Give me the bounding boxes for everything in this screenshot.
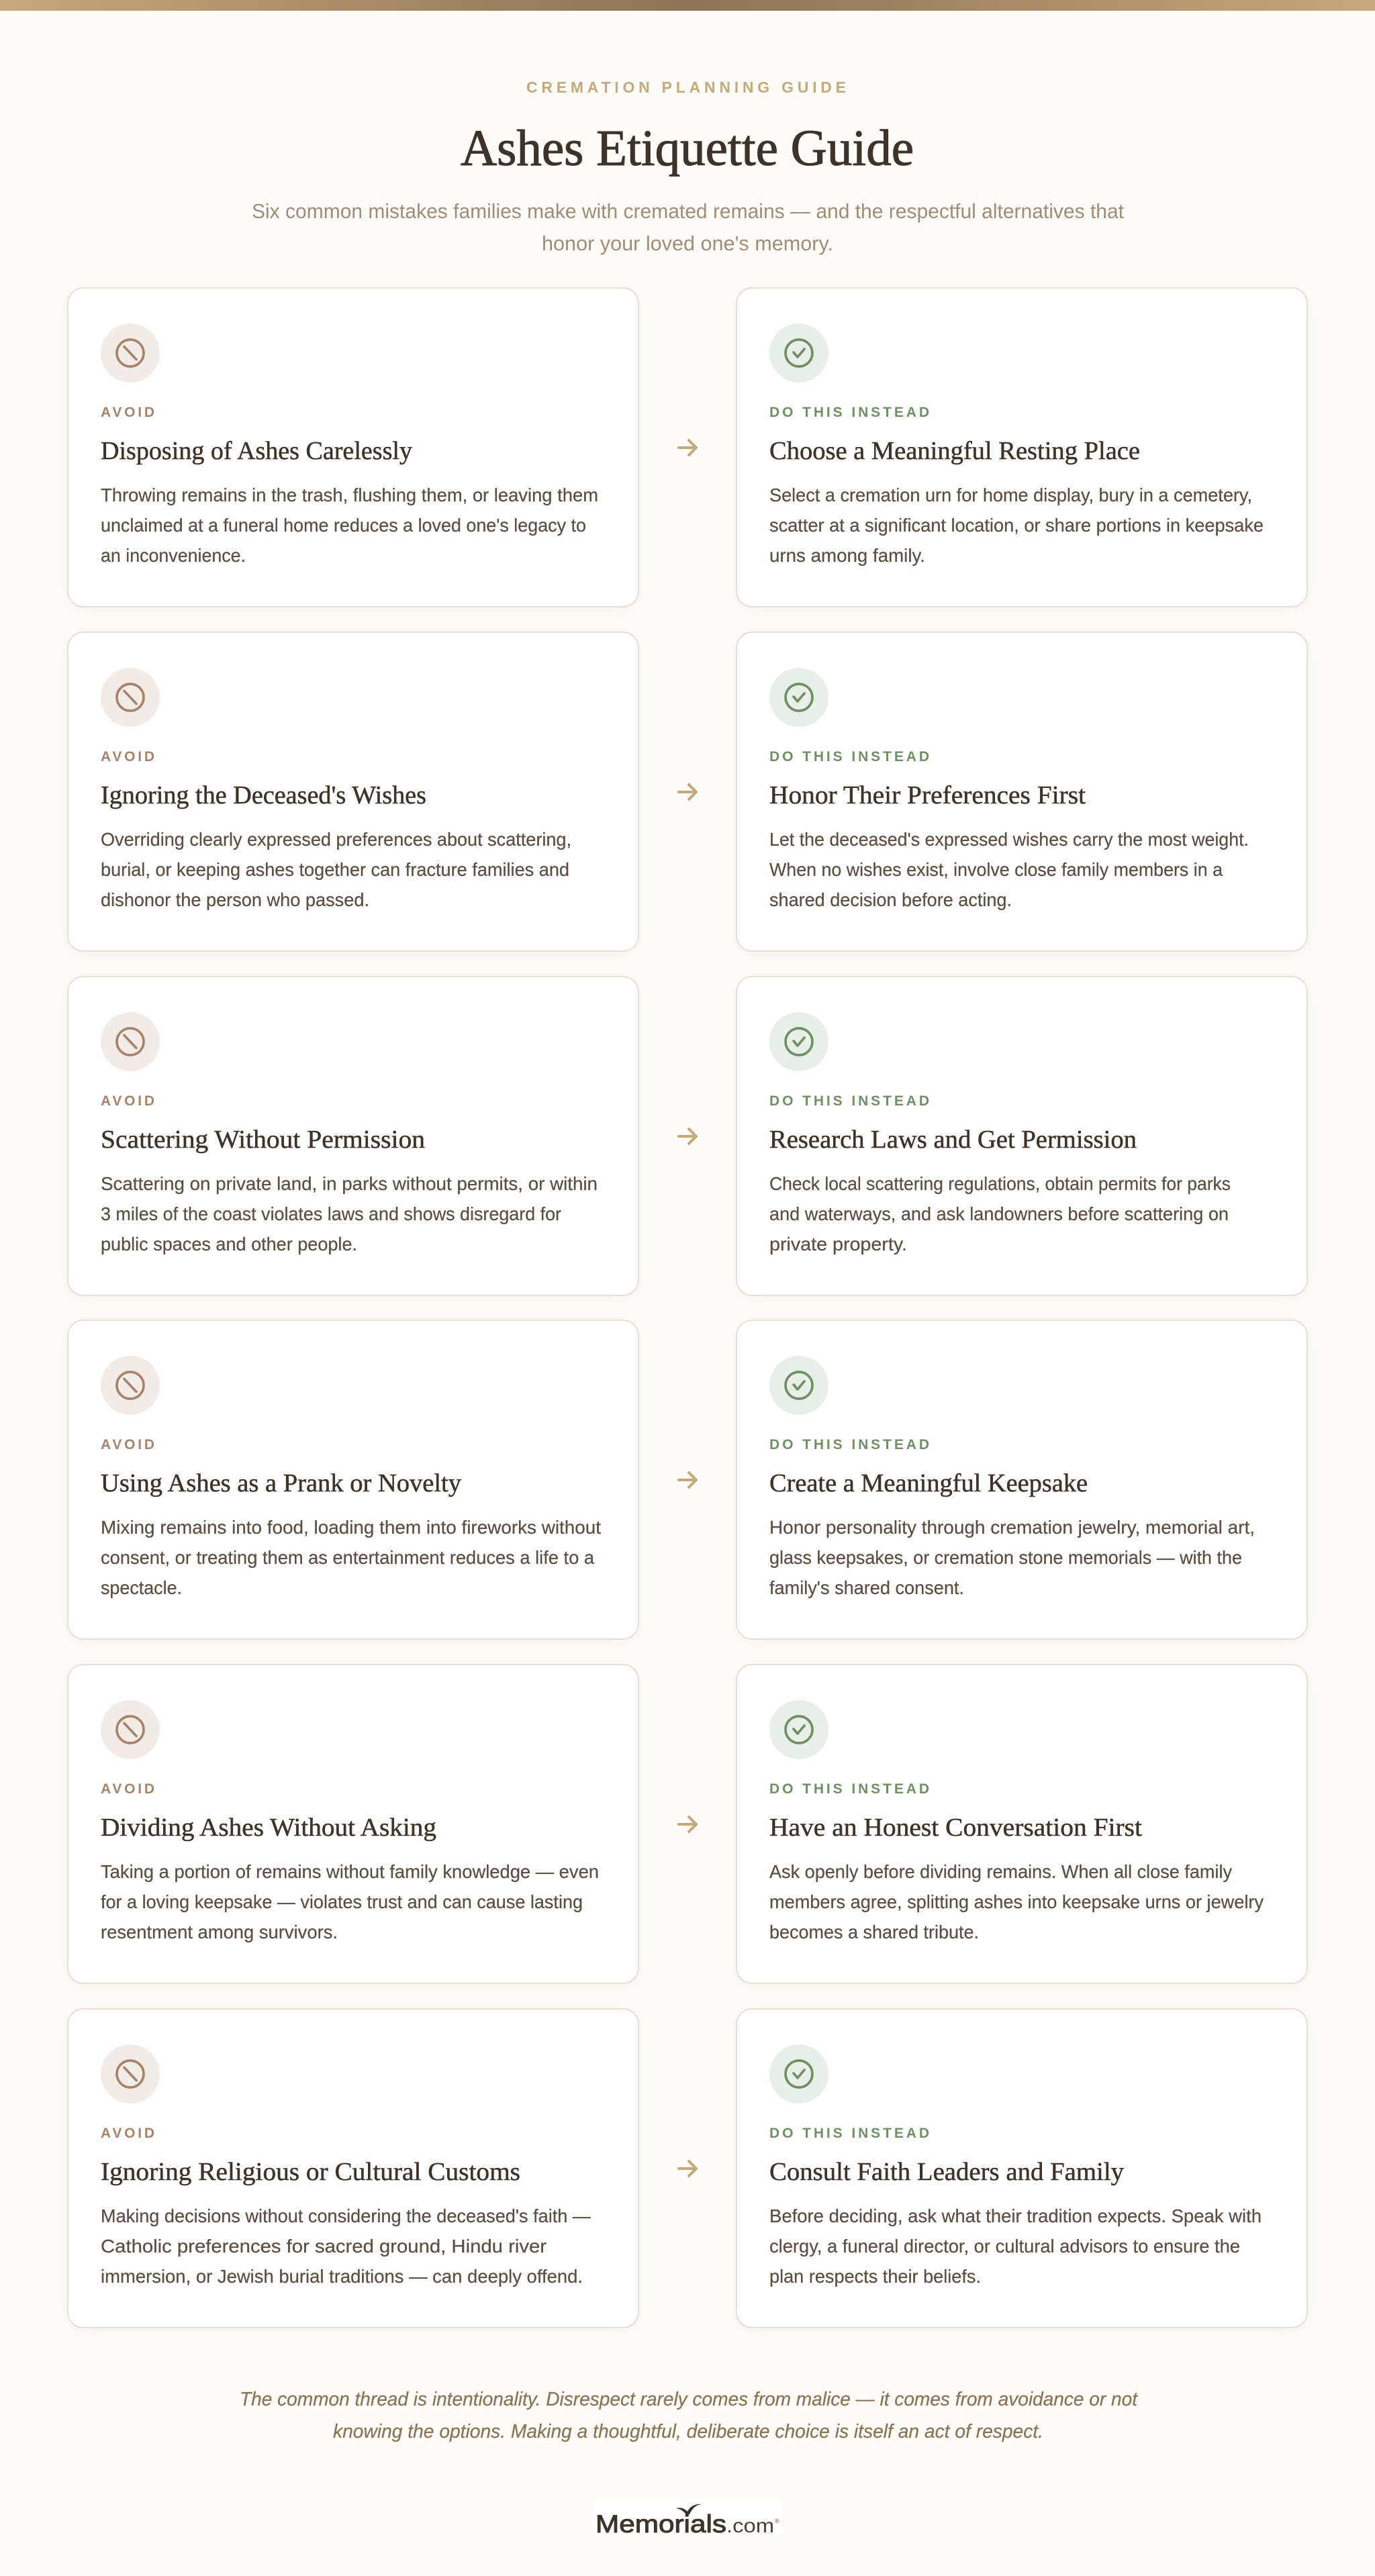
label: AVOID [101,1781,154,1797]
label: DO THIS INSTEAD [769,2126,929,2141]
description: scatter at a significant location, or share portions in keepsake [769,515,1264,536]
logo: Memorials.com [596,2504,779,2535]
description [769,829,1249,910]
description [101,1517,601,1598]
description: and waterways, and ask landowners before scattering on [769,1203,1229,1224]
icon: check [769,324,828,383]
description: clergy, a funeral director, or cultural advisors to ensure the [769,2236,1240,2257]
page header [252,79,1124,255]
heading: Consult Faith Leaders and Family [769,2158,1124,2186]
closing note: knowing the options. Making a thoughtful, deliberate choice is itself an act of respect. [333,2421,1043,2442]
description: Let the deceased's expressed wishes carry the most weight. [769,829,1249,850]
description: Taking a portion of remains without family knowledge — even [101,1861,599,1882]
description: Ask openly before dividing remains. When all close family [769,1861,1232,1882]
description [769,485,1264,566]
description: for a loving keepsake — violates trust and can cause lasting [101,1891,583,1912]
description: plan respects their beliefs. [769,2266,981,2287]
heading: Research Laws and Get Permission [769,1126,1137,1154]
description [769,1517,1255,1598]
panel: instead 5 [736,1664,1308,1984]
label: DO THIS INSTEAD [769,749,929,764]
heading: Choose a Meaningful Resting Place [769,437,1140,465]
description: consent, or treating them as entertainment reduces a life to a [101,1547,594,1568]
description [101,1173,598,1254]
arrow 3 [677,1128,698,1145]
subtitle: honor your loved one's memory. [542,232,833,255]
icon: check [769,2044,828,2103]
label: DO THIS INSTEAD [769,405,929,420]
panel: instead 1 [736,287,1308,607]
description: Scattering on private land, in parks without permits, or within [101,1173,598,1194]
icon: prohibited [101,324,160,383]
heading: Scattering Without Permission [101,1126,425,1154]
label: AVOID [101,749,154,764]
arrow 6 [677,2160,698,2177]
description: Before deciding, ask what their tradition expects. Speak with [769,2206,1262,2226]
description [101,1861,599,1942]
icon: prohibited [101,2044,160,2103]
description: Mixing remains into food, loading them into fireworks without [101,1517,601,1538]
icon: prohibited [101,1356,160,1415]
arrow 1 [677,439,698,456]
label: AVOID [101,405,154,420]
icon: check [769,1700,828,1759]
arrow 4 [677,1471,698,1489]
label: AVOID [101,1437,154,1452]
description: burial, or keeping ashes together can fracture families and [101,859,569,880]
icon: prohibited [101,1700,160,1759]
description: 3 miles of the coast violates laws and shows disregard for [101,1203,561,1224]
logo registered mark: ® [775,2518,779,2524]
heading: Ignoring the Deceased's Wishes [101,781,426,809]
panel: avoid 6 [67,2008,639,2328]
label: AVOID [101,1093,154,1109]
closing note: The common thread is intentionality. Disrespect rarely comes from malice — it comes from avoidance or not [240,2389,1139,2410]
panel: avoid 1 [67,287,639,607]
description: Overriding clearly expressed preferences about scattering, [101,829,571,850]
heading: Ignoring Religious or Cultural Customs [101,2158,520,2186]
panel: avoid 4 [67,1320,639,1640]
heading: Create a Meaningful Keepsake [769,1469,1088,1497]
description: Making decisions without considering the deceased's faith — [101,2206,591,2226]
description: unclaimed at a funeral home reduces a loved one's legacy to [101,515,586,536]
heading: Honor Their Preferences First [769,781,1086,809]
top gradient bar [0,0,1375,11]
description: shared decision before acting. [769,889,1012,910]
description [101,2206,591,2287]
arrow 5 [677,1815,698,1834]
description: an inconvenience. [101,545,246,566]
description: When no wishes exist, involve close family members in a [769,859,1223,880]
description [101,485,598,566]
logo bird [676,2504,702,2516]
description: members agree, splitting ashes into keepsake urns or jewelry [769,1891,1264,1912]
label: AVOID [101,2126,154,2141]
description: Throwing remains in the trash, flushing them, or leaving them [101,485,598,505]
heading: Using Ashes as a Prank or Novelty [101,1469,461,1497]
description: private property. [769,1234,907,1254]
description: Honor personality through cremation jewelry, memorial art, [769,1517,1255,1538]
description: Catholic preferences for sacred ground, Hindu river [101,2236,547,2257]
heading: Disposing of Ashes Carelessly [101,437,412,465]
description: glass keepsakes, or cremation stone memorials — with the [769,1547,1242,1568]
label: DO THIS INSTEAD [769,1437,929,1452]
description: becomes a shared tribute. [769,1922,979,1942]
title: Ashes Etiquette Guide [461,120,914,177]
icon: check [769,1012,828,1071]
description [769,1173,1231,1254]
heading: Have an Honest Conversation First [769,1814,1142,1842]
description: Select a cremation urn for home display, bury in a cemetery, [769,485,1252,505]
description [101,829,571,910]
heading: Dividing Ashes Without Asking [101,1814,436,1842]
description: resentment among survivors. [101,1922,338,1942]
kicker: CREMATION PLANNING GUIDE [526,79,846,96]
panel: avoid 2 [67,632,639,952]
icon: prohibited [101,1012,160,1071]
subtitle: Six common mistakes families make with cremated remains — and the respectful alternatives that [252,199,1124,223]
panel: instead 3 [736,976,1308,1296]
label: DO THIS INSTEAD [769,1781,929,1797]
description: spectacle. [101,1577,182,1598]
panel: avoid 5 [67,1664,639,1984]
description [769,1861,1264,1942]
description: public spaces and other people. [101,1234,357,1254]
panel: instead 4 [736,1320,1308,1640]
label: DO THIS INSTEAD [769,1093,929,1109]
panel: avoid 3 [67,976,639,1296]
closing note [240,2389,1139,2442]
panel: instead 6 [736,2008,1308,2328]
description: family's shared consent. [769,1577,964,1598]
icon: check [769,668,828,727]
subtitle [252,199,1124,255]
icon: prohibited [101,668,160,727]
description: dishonor the person who passed. [101,889,369,910]
description: urns among family. [769,545,925,566]
icon: check [769,1356,828,1415]
arrow 2 [677,783,698,801]
panel: instead 2 [736,632,1308,952]
description: immersion, or Jewish burial traditions — can deeply offend. [101,2266,583,2287]
description: Check local scattering regulations, obtain permits for parks [769,1173,1231,1194]
description [769,2206,1262,2287]
